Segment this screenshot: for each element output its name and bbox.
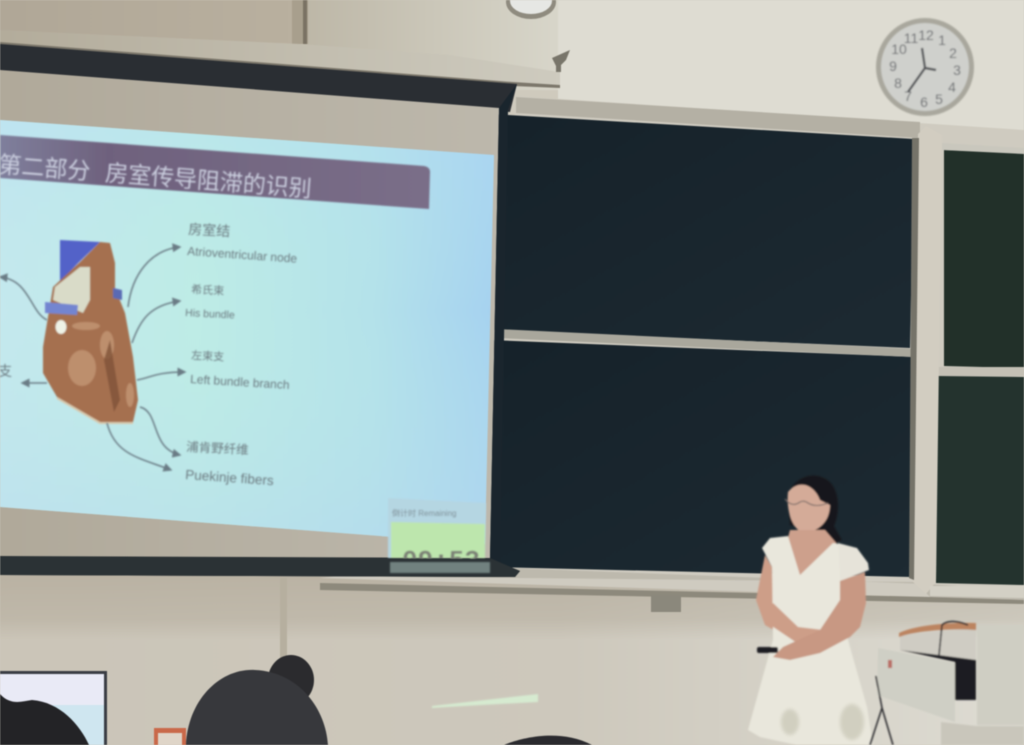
slide labels: 浦肯野纤维 <box>186 440 249 457</box>
cables <box>870 622 968 745</box>
audience: head left <box>0 694 89 745</box>
wall clock: 11 <box>904 30 918 46</box>
screen base bar over timer <box>0 557 520 577</box>
wall clock: 4 <box>948 79 956 95</box>
leader arrows <box>0 247 185 470</box>
wall clock <box>876 18 974 116</box>
screen casing <box>0 30 560 85</box>
panel <box>877 648 955 722</box>
top black band <box>0 44 517 112</box>
wall clock: 3 <box>953 62 961 78</box>
slide labels <box>0 221 298 488</box>
hair <box>788 475 842 545</box>
audience: head bottom <box>504 736 592 745</box>
slide title bar <box>0 135 430 209</box>
heart texture <box>68 322 134 407</box>
audience: small sticker <box>154 728 186 745</box>
blackboard lower <box>490 340 914 577</box>
neck and chest <box>786 530 838 580</box>
right dark edge <box>490 84 517 568</box>
timer widget: 09:53 <box>402 546 480 576</box>
wall clock: 10 <box>891 41 907 57</box>
slide labels: 房室结 <box>188 221 231 239</box>
wall clock: 6 <box>920 94 928 110</box>
wall column upper <box>292 0 308 44</box>
timer widget <box>388 498 486 576</box>
wall box under board <box>651 595 681 612</box>
wall: upper middle <box>304 0 560 90</box>
remote <box>757 647 778 653</box>
slide title: 第二部分 房室传导阻滞的识别 <box>0 151 313 202</box>
bracket on board <box>552 50 570 72</box>
timer widget: 倒计时 Remaining <box>392 508 456 518</box>
wall clock: 2 <box>949 45 957 61</box>
blackboard frame <box>320 96 1024 604</box>
wall clock: 5 <box>935 91 943 107</box>
small blue band <box>113 288 122 300</box>
great vessel blue <box>60 240 100 282</box>
board right rail <box>938 367 1024 376</box>
small round clock at top <box>506 0 556 19</box>
node blue band <box>45 302 78 315</box>
blackboard right upper <box>944 150 1024 368</box>
blackboard divider rail <box>497 329 915 357</box>
wall: upper right <box>558 0 1024 140</box>
slide labels: Atrioventricular node <box>187 244 298 266</box>
blackboard upper <box>490 114 914 348</box>
heart dark groove <box>104 340 120 412</box>
timer reflection <box>390 562 490 573</box>
upper left arm <box>756 555 800 645</box>
screen border <box>0 70 499 558</box>
heart body <box>43 242 138 422</box>
wall clock: 7 <box>904 88 912 104</box>
dress skirt pattern <box>781 704 864 740</box>
casing edge <box>0 42 560 88</box>
board right top frame <box>942 143 1024 154</box>
wall clock: 1 <box>938 32 946 48</box>
wall clock: 12 <box>918 27 934 43</box>
projector screen <box>0 30 560 577</box>
speaker woman <box>748 475 873 745</box>
pedestal <box>941 722 1024 745</box>
slide labels: 左束支 <box>191 349 224 364</box>
right arm <box>773 572 866 660</box>
wall: lower <box>0 570 1024 745</box>
slide labels: 希氏束 <box>191 282 225 298</box>
board post shadow <box>909 138 919 580</box>
face <box>788 485 830 533</box>
desk glass <box>900 628 976 660</box>
wall: shaded band under board <box>0 570 1024 640</box>
slide labels: Left bundle branch <box>190 372 290 392</box>
white vessel <box>56 320 66 334</box>
dark gap <box>900 650 976 700</box>
projected light streak <box>432 694 538 708</box>
audience: head centre <box>186 670 328 745</box>
blackboard right lower <box>936 376 1024 585</box>
right cabinet <box>977 625 1024 725</box>
wall clock: 9 <box>889 58 897 74</box>
heart diagram <box>43 240 138 423</box>
left forearm <box>763 603 823 645</box>
board vertical post <box>913 126 942 594</box>
red mark <box>888 660 892 668</box>
wall column lower <box>280 578 287 658</box>
slide labels: His bundle <box>185 307 235 322</box>
slide labels: Puekinje fibers <box>185 467 274 488</box>
pale aorta <box>53 267 90 313</box>
lectern <box>870 622 1024 745</box>
wall clock: 8 <box>894 75 902 91</box>
projected slide <box>0 120 494 544</box>
wall: upper left <box>0 0 296 60</box>
glasses <box>785 499 828 506</box>
heart edge <box>57 398 133 423</box>
audience: laptop <box>0 671 107 745</box>
dress skirt and bodice <box>748 536 873 745</box>
desk rim <box>899 623 976 637</box>
dress sleeve right <box>838 543 869 581</box>
audience: head back <box>268 655 314 705</box>
board bottom right ledge <box>930 586 1024 598</box>
bottom black band <box>0 556 520 577</box>
